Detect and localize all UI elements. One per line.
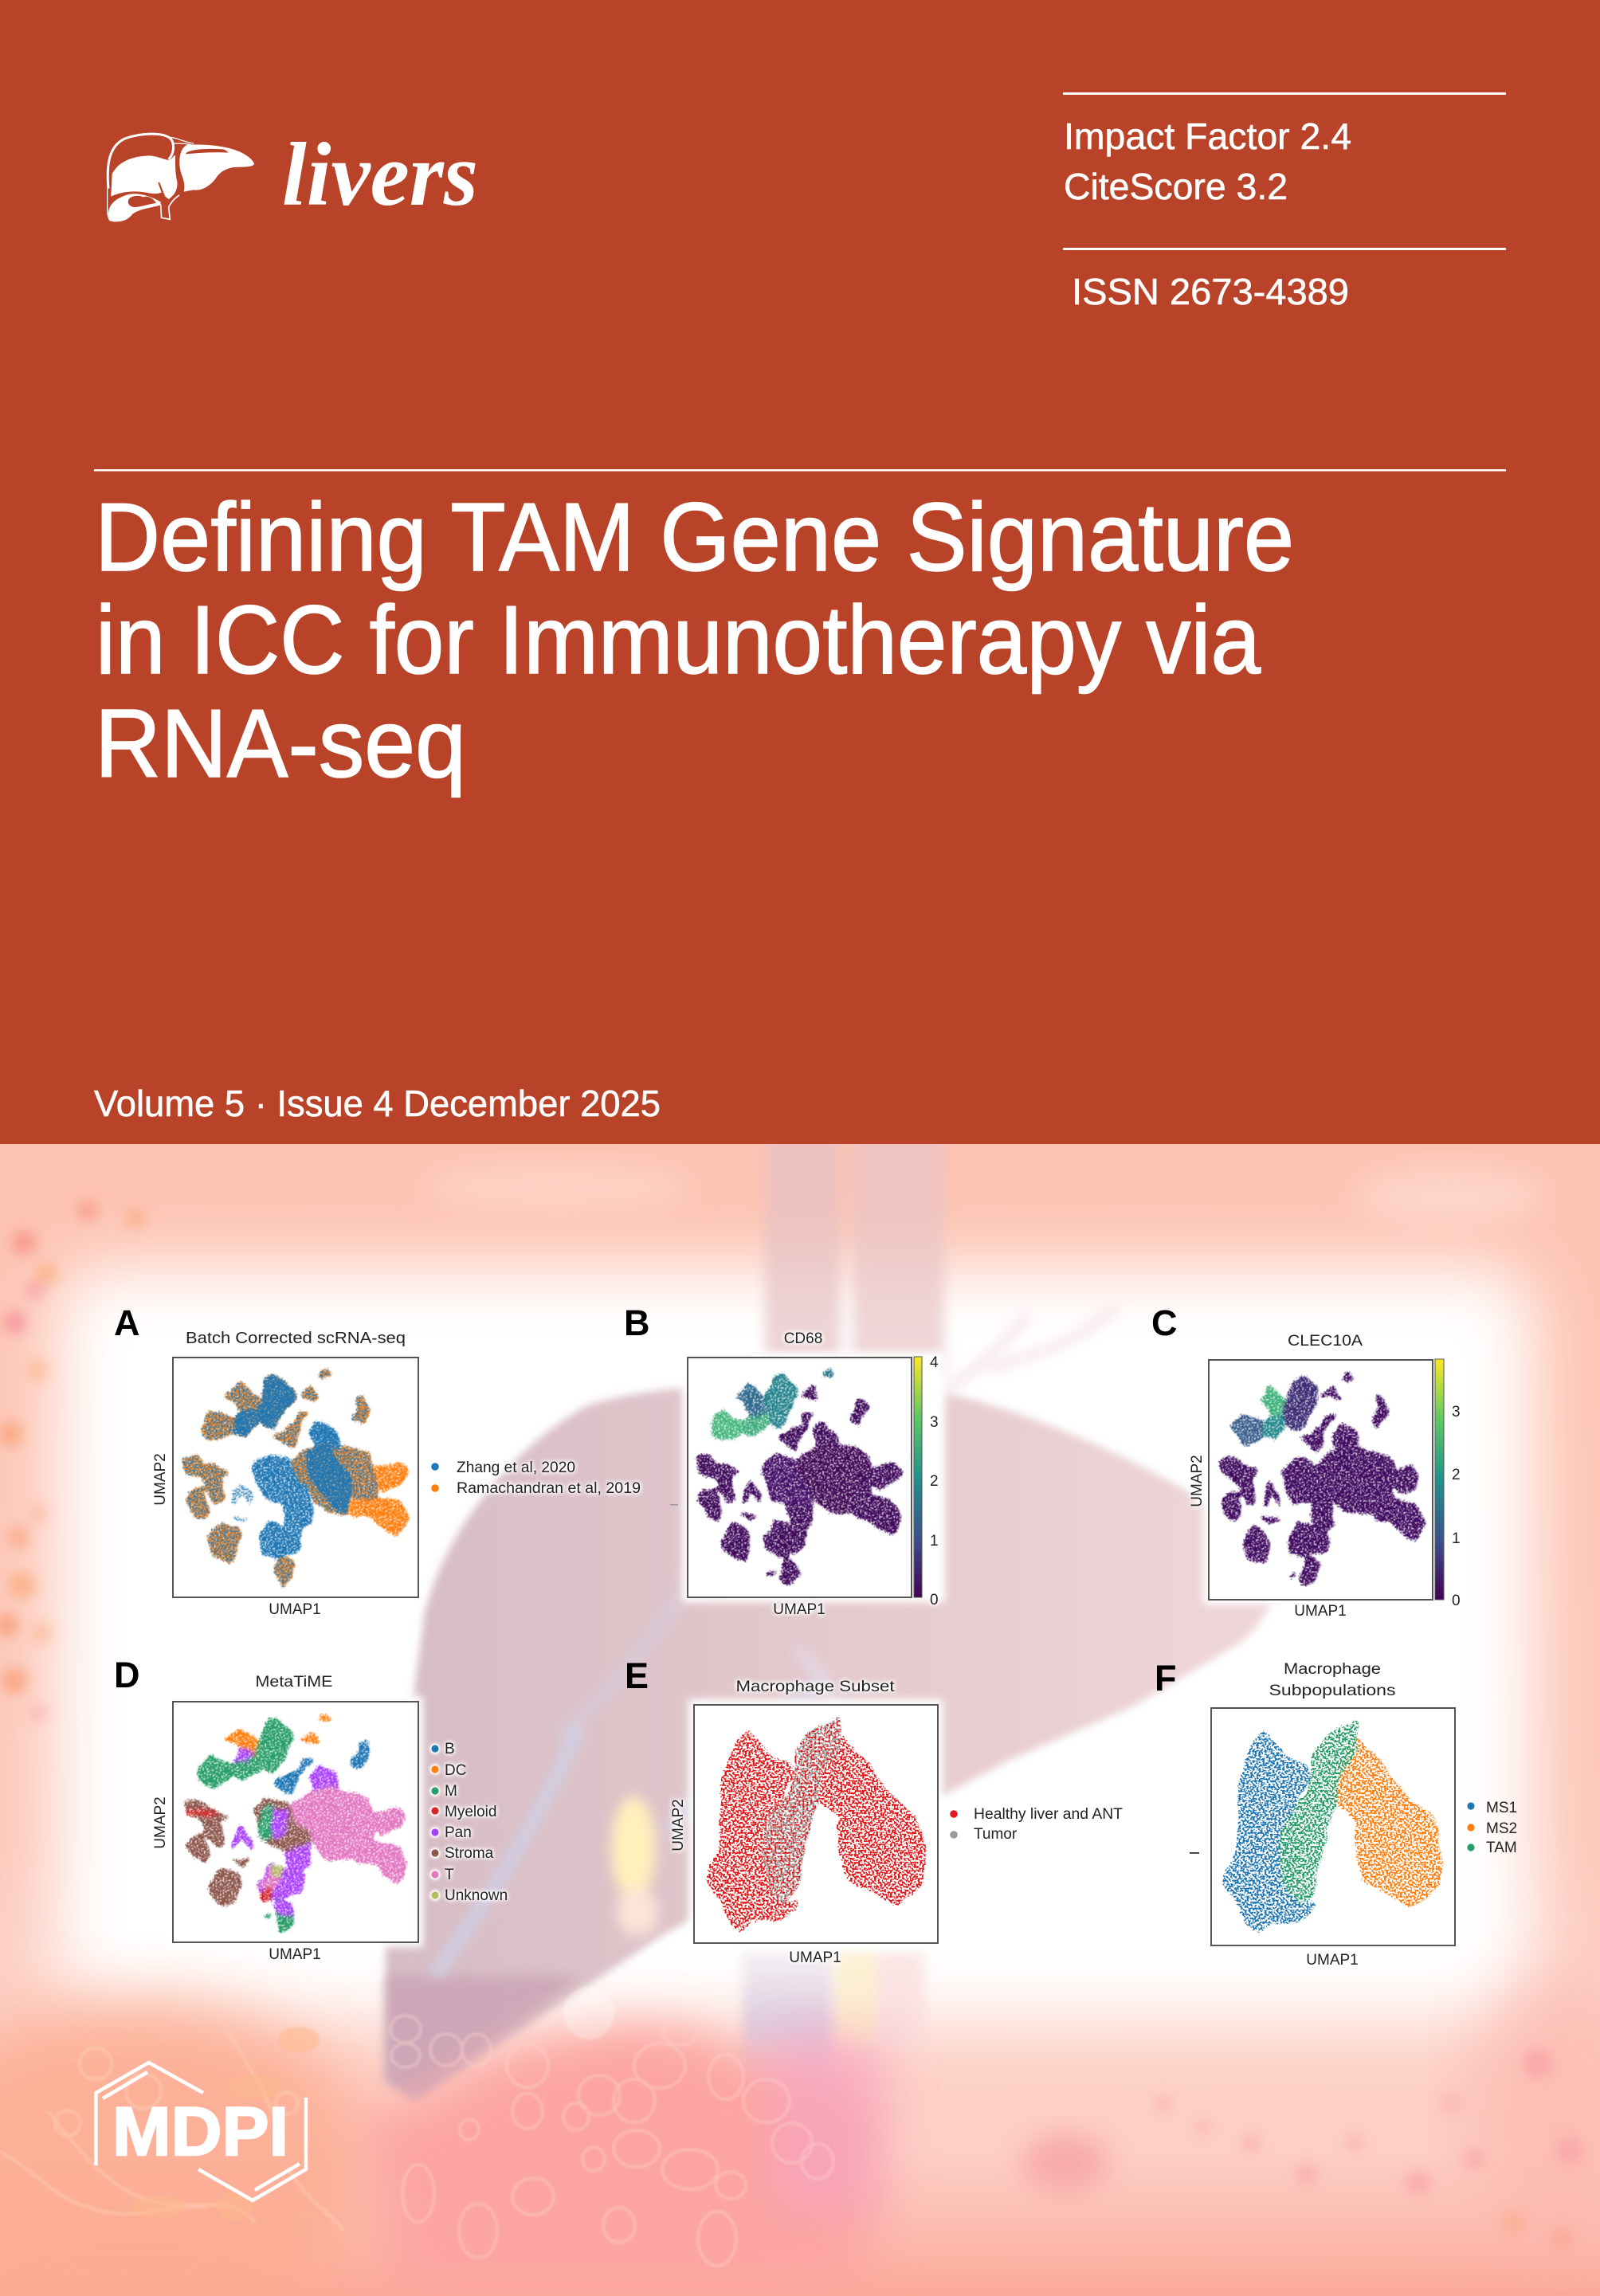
legend: MS2: [1486, 1820, 1517, 1837]
legend: [1467, 1800, 1517, 1856]
icon: liver: [108, 134, 254, 221]
title rule: [94, 469, 1506, 472]
scatter: cell types: [183, 1714, 408, 1931]
scatter: expression: [1218, 1372, 1423, 1589]
legend: Tumor: [974, 1826, 1018, 1843]
title: [95, 483, 1294, 797]
scatter: blue dataset: [183, 1369, 376, 1586]
lower background artwork: [0, 1135, 1600, 2296]
axis tick mark: [670, 1504, 678, 1506]
journal name: livers: [282, 125, 478, 225]
title F: Subpopulations: [1269, 1683, 1396, 1699]
journal logo: liver icon and name: [108, 125, 478, 225]
volume and issue: Volume 5 · Issue 4 December 2025: [94, 1083, 661, 1124]
legend: DC: [445, 1762, 466, 1779]
axis label UMAP2: UMAP2: [152, 1796, 169, 1849]
panel A: batch corrected UMAP: [114, 1303, 641, 1618]
scatter: healthy liver cells: [706, 1728, 926, 1932]
title E: Macrophage Subset: [736, 1679, 895, 1695]
legend: MS1: [1486, 1800, 1517, 1816]
scatter: overlapping healthy cells: [763, 1715, 842, 1904]
panel letter C: C: [1151, 1303, 1178, 1343]
legend: [431, 1741, 508, 1904]
legend: [950, 1806, 1123, 1843]
issn: ISSN 2673-4389: [1072, 271, 1349, 312]
legend: [431, 1459, 641, 1497]
journal metrics: Impact Factor 2.4: [1064, 116, 1351, 157]
title: in ICC for Immunotherapy via: [96, 586, 1261, 694]
axis tick mark: [1190, 1852, 1199, 1854]
axis label UMAP2: UMAP2: [670, 1799, 687, 1851]
legend: B: [445, 1741, 455, 1757]
colour bar: 2: [1452, 1467, 1461, 1483]
axis label UMAP1: UMAP1: [789, 1949, 841, 1966]
axis label UMAP1: UMAP1: [269, 1946, 321, 1963]
legend: M: [445, 1783, 457, 1800]
panel C: CLEC10A expression: [1151, 1303, 1466, 1620]
colour bar: 4: [930, 1354, 939, 1371]
panel B: CD68 expression: [624, 1303, 945, 1618]
panel D: MetaTiME annotation: [114, 1655, 508, 1963]
title F: [1269, 1661, 1396, 1699]
title B: CD68: [784, 1330, 822, 1347]
axis label UMAP1: UMAP1: [269, 1601, 321, 1618]
legend: T: [445, 1867, 454, 1883]
legend: Pan: [445, 1824, 472, 1841]
colour bar: 0: [1452, 1593, 1461, 1609]
panel letter A: A: [114, 1303, 140, 1343]
panel E: macrophage subset: [625, 1655, 1123, 1966]
scatter: expression: [697, 1369, 902, 1586]
title A: Batch Corrected scRNA-seq: [186, 1330, 406, 1347]
colour bar: 0: [930, 1592, 939, 1608]
journal metrics: [1064, 116, 1351, 207]
scatter: MS1 cells: [1223, 1731, 1316, 1934]
legend: Ramachandran et al, 2019: [457, 1480, 641, 1497]
legend: Zhang et al, 2020: [457, 1459, 575, 1476]
colour bar: 3: [930, 1414, 939, 1431]
legend: Healthy liver and ANT: [974, 1806, 1123, 1823]
colour bar: [1435, 1359, 1461, 1609]
title: Defining TAM Gene Signature: [95, 483, 1294, 591]
icon: hexagon outline: [96, 2063, 306, 2200]
axis label UMAP2: UMAP2: [152, 1453, 169, 1506]
panel F: macrophage subpopulations: [1155, 1658, 1517, 1969]
header rule top: [1063, 92, 1506, 95]
colour bar: 1: [930, 1533, 939, 1550]
axis label UMAP2: UMAP2: [1189, 1455, 1206, 1507]
colour bar: 2: [930, 1473, 939, 1490]
colour bar: 1: [1452, 1530, 1461, 1547]
legend: Stroma: [445, 1845, 494, 1862]
axis label UMAP1: UMAP1: [1306, 1952, 1359, 1969]
scatter: MS2 cells: [1330, 1737, 1443, 1906]
top banner background: [0, 0, 1600, 1144]
axis label UMAP1: UMAP1: [773, 1601, 825, 1618]
panel letter F: F: [1155, 1658, 1176, 1698]
journal metrics: CiteScore 3.2: [1064, 166, 1288, 207]
panel letter D: D: [114, 1655, 140, 1695]
MDPI wordmark: MDPI: [112, 2094, 288, 2170]
title F: Macrophage: [1284, 1661, 1381, 1678]
MDPI publisher logo: [96, 2063, 306, 2200]
colour bar: [914, 1354, 939, 1608]
legend: TAM: [1486, 1840, 1517, 1856]
colour bar: 3: [1452, 1404, 1461, 1420]
title: RNA-seq: [95, 689, 466, 797]
header rule bottom: [1063, 248, 1506, 250]
panel letter B: B: [624, 1303, 650, 1343]
axis label UMAP1: UMAP1: [1294, 1603, 1347, 1620]
scatter: TAM cells: [1280, 1718, 1359, 1906]
legend: Myeloid: [445, 1804, 496, 1820]
legend: Unknown: [445, 1887, 508, 1904]
panel letter E: E: [625, 1655, 649, 1696]
scatter: blue dense clusters: [232, 1374, 351, 1556]
title C: CLEC10A: [1288, 1333, 1363, 1350]
title D: MetaTiME: [255, 1674, 333, 1691]
scatter: orange dataset: [183, 1369, 408, 1586]
scatter: tumor cells: [763, 1715, 842, 1904]
